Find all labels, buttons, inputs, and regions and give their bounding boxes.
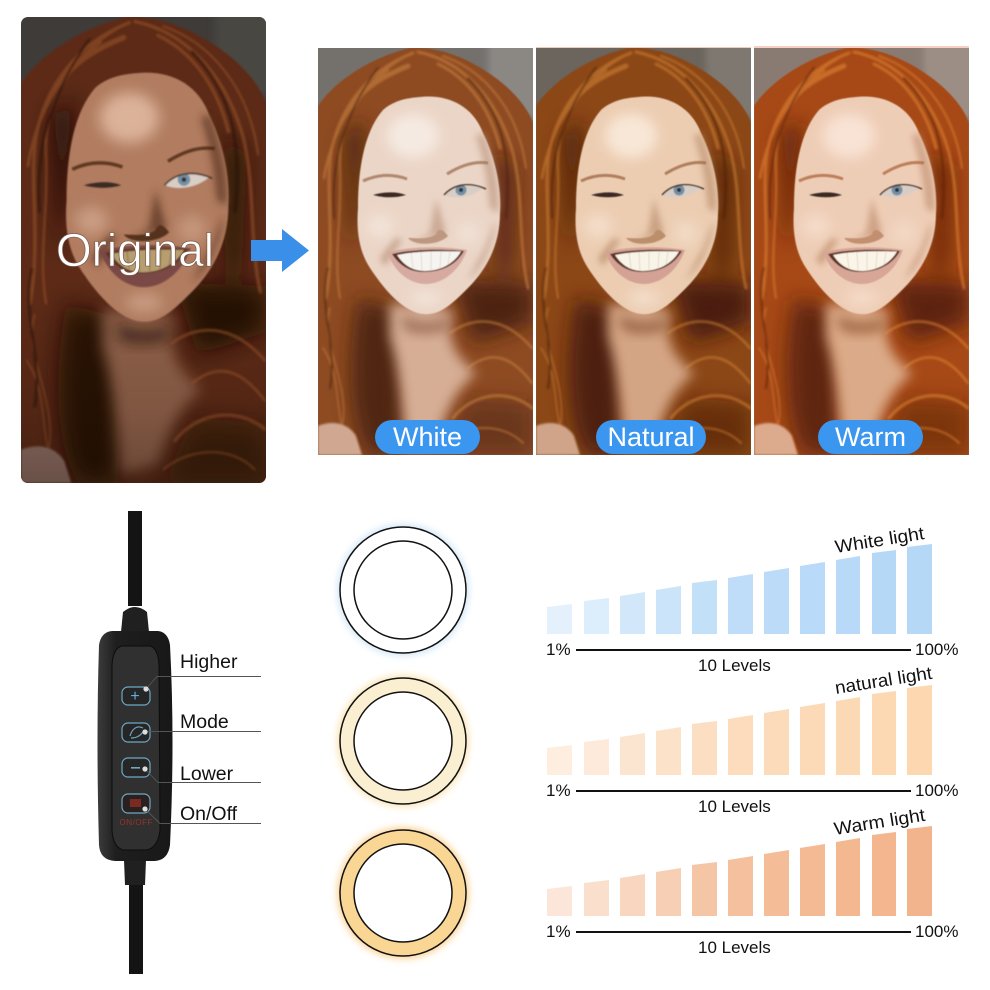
level chart: warm light: 1% bbox=[546, 922, 571, 941]
bars bbox=[547, 685, 932, 775]
button: minus bbox=[122, 758, 150, 777]
button labels: Higher bbox=[180, 651, 238, 673]
button labels: Mode bbox=[180, 711, 229, 733]
button: plus: + bbox=[130, 688, 140, 705]
photo panel: White bbox=[318, 38, 548, 455]
level chart: white light: White light bbox=[833, 523, 926, 557]
level chart: white light bbox=[546, 523, 958, 675]
button labels: On/Off bbox=[180, 803, 238, 825]
ring icon: white light bbox=[337, 524, 469, 656]
pill: White: White bbox=[393, 422, 462, 452]
pill: Natural: Natural bbox=[607, 422, 695, 452]
level chart: natural light: 100% bbox=[915, 781, 958, 800]
level chart: warm light: 10 Levels bbox=[698, 938, 771, 957]
level chart: warm light: 100% bbox=[915, 922, 958, 941]
leader dots and lines bbox=[142, 676, 261, 824]
pill: Warm: Warm bbox=[835, 422, 906, 452]
button: power bbox=[120, 794, 153, 827]
level chart: natural light: 10 Levels bbox=[698, 797, 771, 816]
bars bbox=[547, 826, 932, 916]
button labels: Lower bbox=[180, 763, 234, 785]
button labels bbox=[180, 651, 238, 825]
level chart: warm light: Warm light bbox=[832, 805, 926, 839]
level chart: white light: 100% bbox=[915, 640, 958, 659]
bars bbox=[547, 544, 932, 634]
button: power: ON/OFF bbox=[120, 818, 153, 827]
label: Original: Original bbox=[56, 224, 214, 276]
level chart: white light: 10 Levels bbox=[698, 656, 771, 675]
pill: Natural bbox=[596, 420, 706, 454]
arrow: right bbox=[251, 229, 309, 272]
pill: White bbox=[375, 420, 480, 454]
cable bbox=[128, 511, 143, 974]
button: plus bbox=[122, 687, 150, 705]
pill: Warm bbox=[818, 420, 923, 454]
photo panel: Natural bbox=[536, 38, 766, 455]
ring icon: warm light bbox=[337, 827, 469, 959]
level chart: warm light bbox=[546, 805, 958, 957]
inline controller bbox=[98, 511, 261, 974]
level chart: natural light: natural light bbox=[833, 663, 933, 698]
ring icon: natural light bbox=[337, 675, 469, 807]
level chart: natural light: 1% bbox=[546, 781, 571, 800]
level chart: white light: 1% bbox=[546, 640, 571, 659]
button panel bbox=[112, 646, 160, 850]
controller body bbox=[98, 631, 172, 861]
photo panel: Original bbox=[21, 6, 283, 483]
level chart: natural light bbox=[546, 663, 958, 816]
photo panel: Warm bbox=[754, 38, 984, 455]
button: mode bbox=[122, 723, 150, 742]
